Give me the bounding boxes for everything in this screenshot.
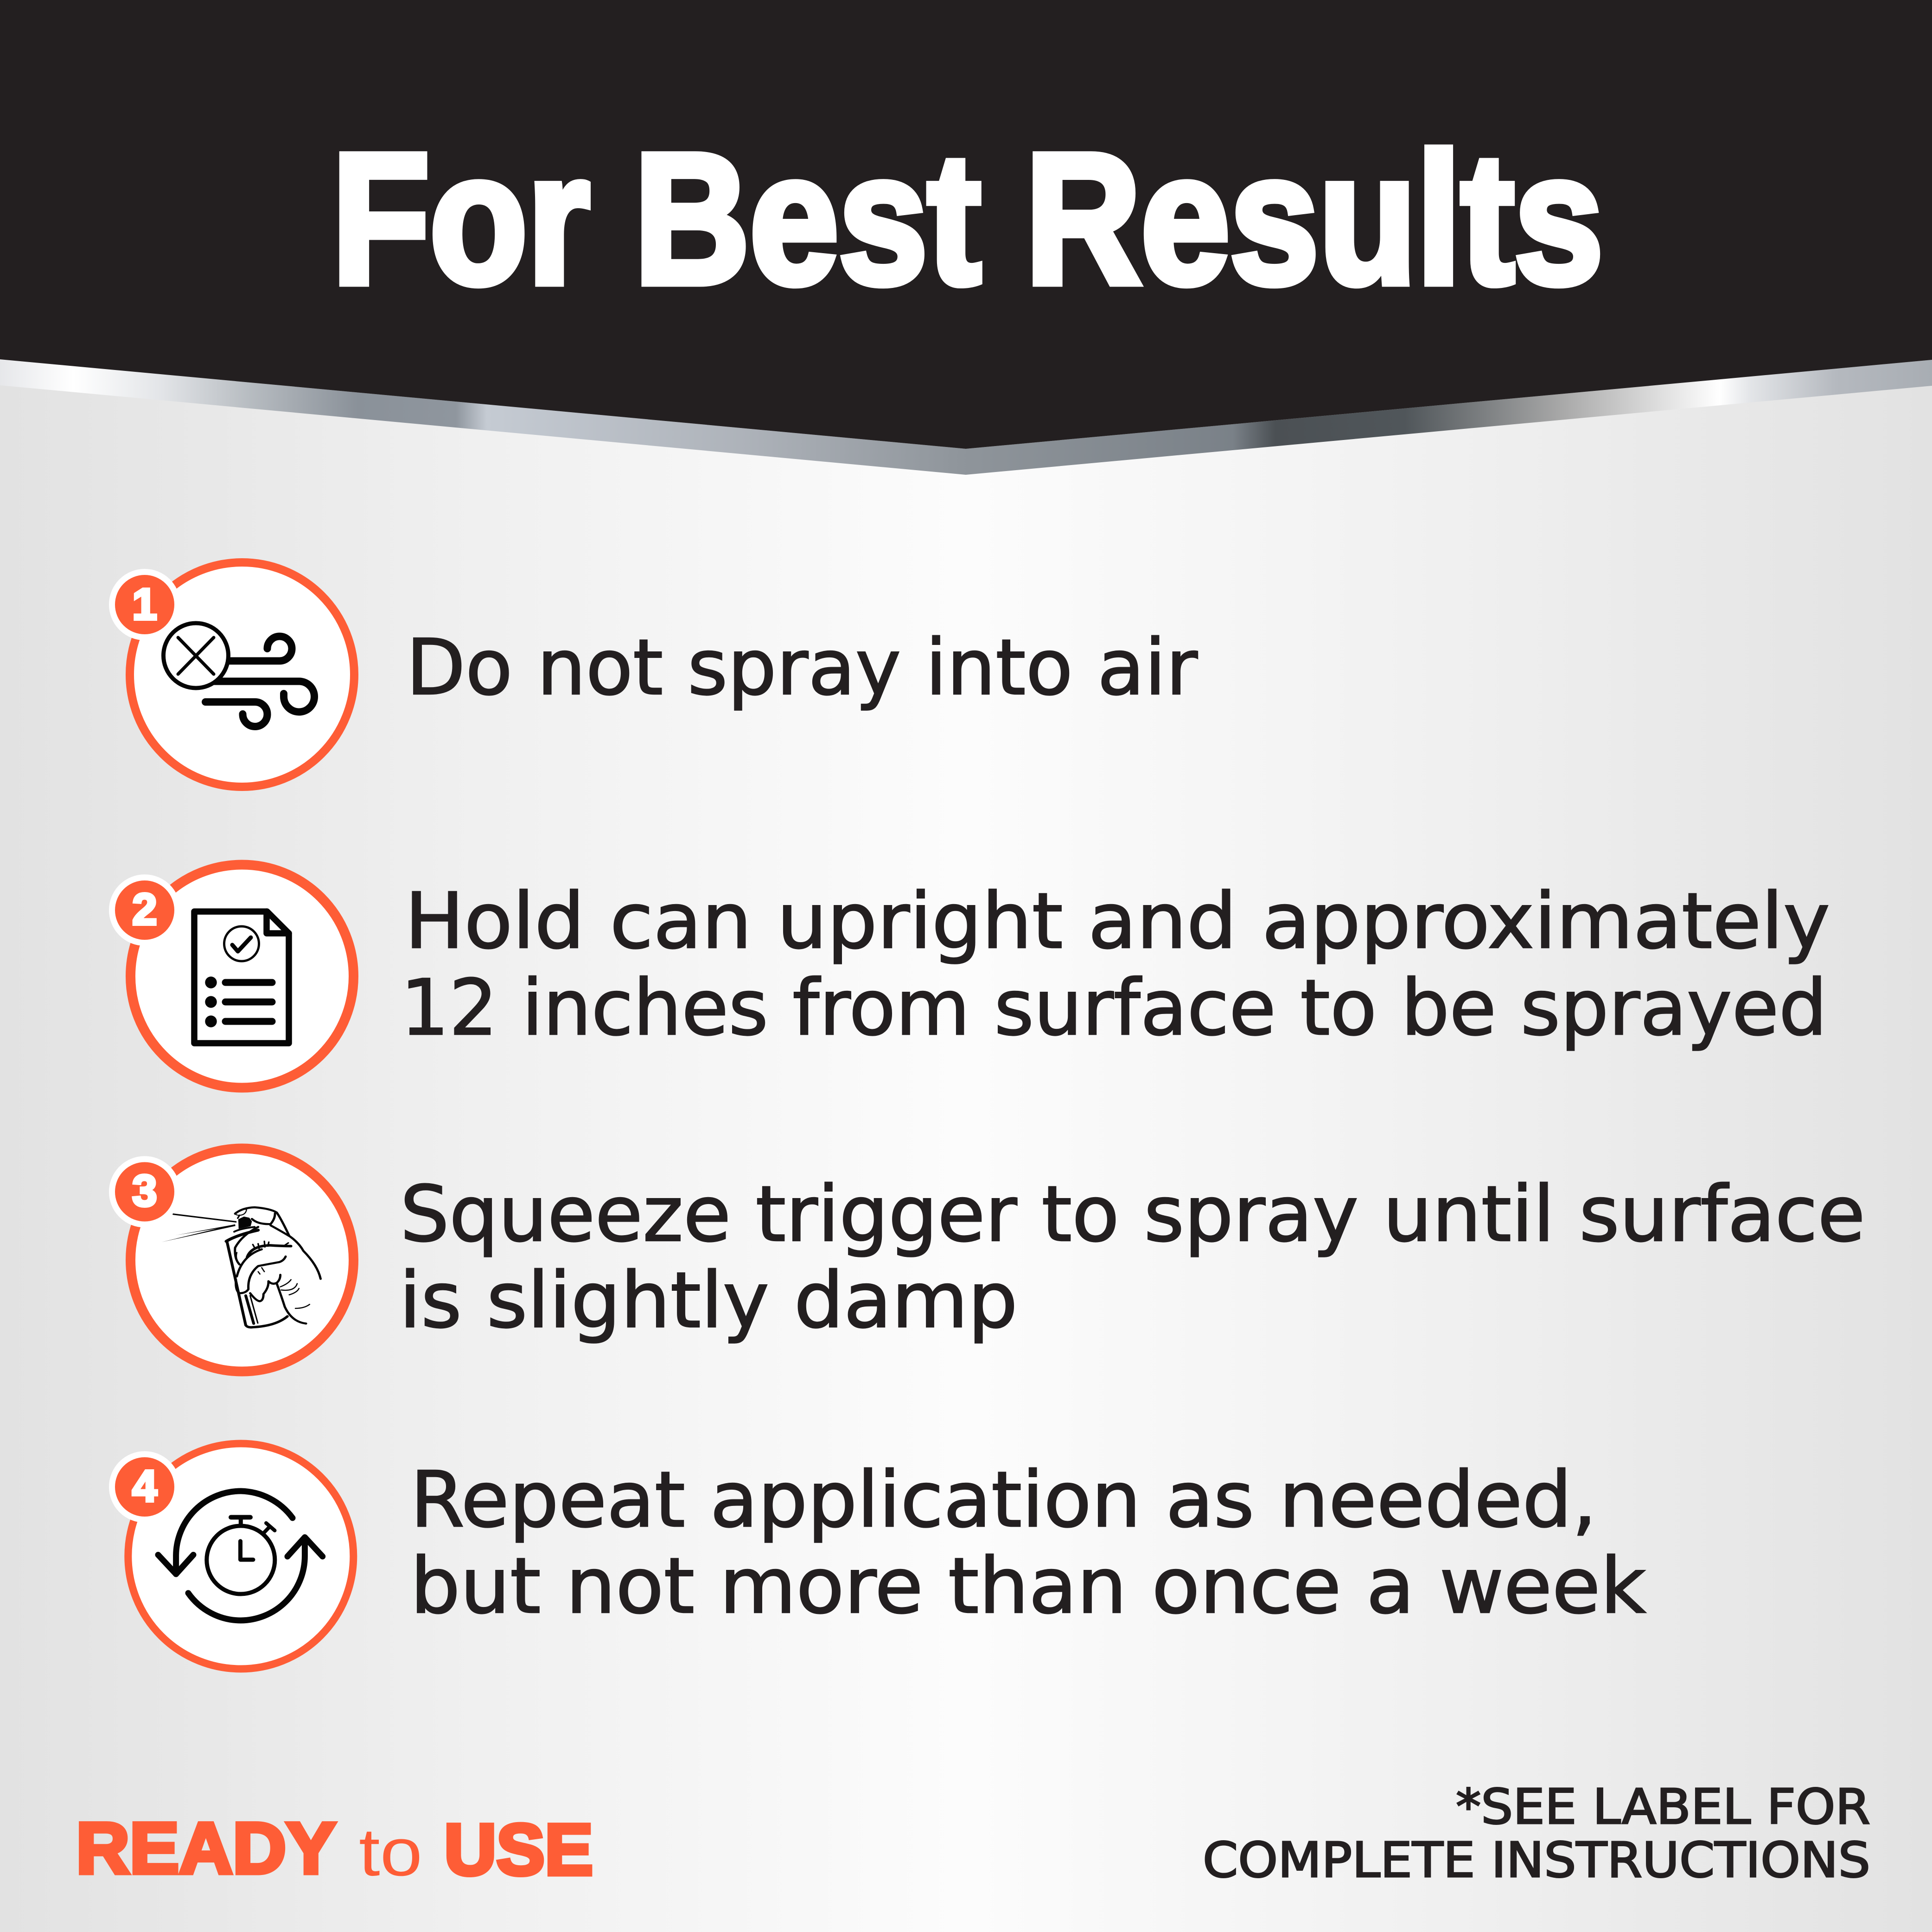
icon: hand spraying can bbox=[161, 1207, 320, 1327]
step 2 text: 12 inches from surface to be sprayed bbox=[401, 963, 1827, 1053]
number badge 1 bbox=[112, 572, 177, 637]
step 1 text: Do not spray into air bbox=[406, 623, 1198, 713]
header panel bbox=[0, 0, 1932, 449]
step 3 text: Squeeze trigger to spray until surface bbox=[400, 1170, 1865, 1259]
number badge 3: 3 bbox=[132, 1166, 157, 1216]
step 4 bbox=[112, 1444, 353, 1669]
step 4 ring bbox=[128, 1444, 353, 1669]
step 2 ring bbox=[131, 865, 353, 1088]
step 1 ring bbox=[130, 562, 354, 787]
step 2 text: Hold can upright and approximately bbox=[405, 877, 1830, 966]
number badge 3 bbox=[112, 1159, 177, 1224]
ready to use tagline: READY bbox=[76, 1808, 336, 1889]
step 3 text: is slightly damp bbox=[399, 1256, 1018, 1345]
step 3 bbox=[112, 1148, 353, 1371]
number badge 2 bbox=[112, 877, 177, 943]
step 1 bbox=[112, 562, 354, 787]
step 2 text bbox=[401, 877, 1830, 1053]
ready to use tagline: to bbox=[359, 1814, 422, 1890]
icon: stopwatch with repeat arrows bbox=[158, 1491, 323, 1620]
ready to use tagline bbox=[76, 1808, 593, 1890]
icon: checklist document bbox=[194, 912, 289, 1043]
metallic chevron band bbox=[0, 359, 1932, 475]
icon: no wind bbox=[163, 623, 314, 727]
title: For Best Results bbox=[332, 115, 1603, 322]
step 3 ring bbox=[131, 1148, 353, 1371]
footnote: *SEE LABEL FOR bbox=[1456, 1779, 1870, 1835]
number badge 2: 2 bbox=[132, 885, 157, 934]
footnote: COMPLETE INSTRUCTIONS bbox=[1203, 1832, 1870, 1888]
step 4 text: Repeat application as needed, bbox=[410, 1455, 1597, 1545]
step 3 text bbox=[399, 1170, 1865, 1345]
step 2 bbox=[112, 865, 353, 1088]
ready to use tagline: USE bbox=[444, 1810, 593, 1890]
number badge 4 bbox=[112, 1454, 177, 1520]
footnote bbox=[1203, 1779, 1870, 1888]
step 4 text bbox=[410, 1455, 1646, 1631]
step 4 text: but not more than once a week bbox=[410, 1542, 1646, 1631]
number badge 1: 1 bbox=[132, 580, 157, 629]
number badge 4: 4 bbox=[132, 1461, 157, 1511]
